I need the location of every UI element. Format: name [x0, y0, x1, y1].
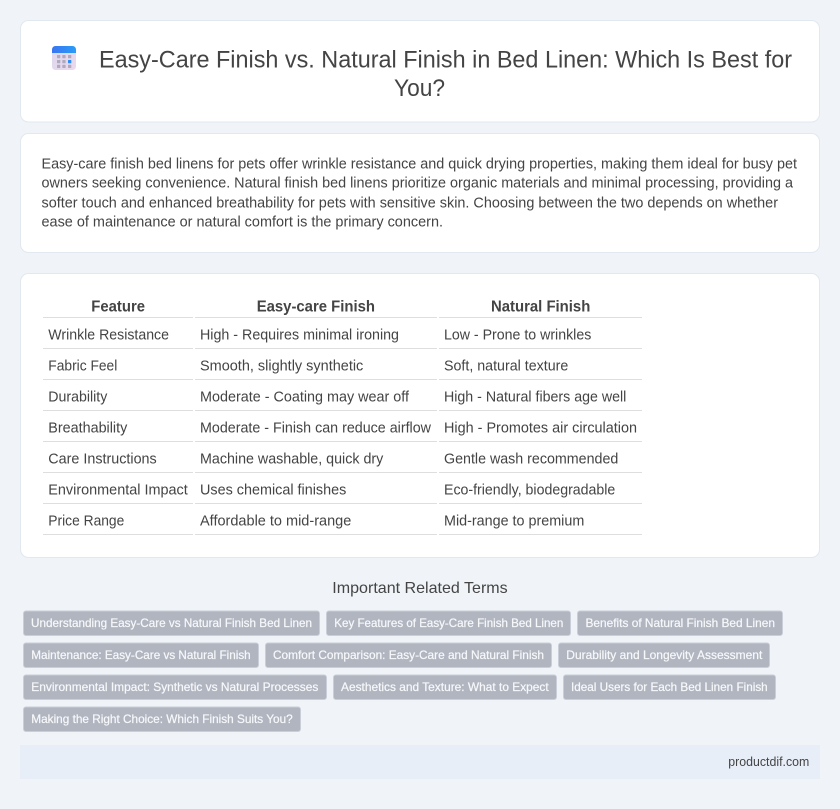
row: care instructions — [43, 451, 642, 473]
panel: comparison table — [20, 274, 820, 558]
tag: Key Features of Easy-Care Finish Bed Linen — [334, 616, 563, 630]
row: price range: Mid-range to premium — [444, 513, 584, 529]
tag: Ideal Users for Each Bed Linen Finish — [571, 680, 768, 694]
tag: Understanding Easy-Care vs Natural Finish Bed Linen — [31, 616, 312, 630]
tag — [326, 611, 570, 636]
row: durability: Moderate - Coating may wear off — [200, 389, 410, 405]
title — [99, 46, 792, 102]
tag: Comfort Comparison: Easy-Care and Natural Finish — [273, 648, 544, 662]
tag — [24, 707, 300, 732]
title: Easy-Care Finish vs. Natural Finish in Bed Linen: Which Is Best for — [99, 46, 792, 74]
tag: Aesthetics and Texture: What to Expect — [341, 680, 549, 694]
tag — [24, 675, 326, 700]
text block: introduction — [42, 156, 797, 230]
text block: introduction: Easy-care finish bed linens for pets offer wrinkle resistance and quick drying properties, making them ideal for busy pet — [42, 156, 797, 172]
row: wrinkle resistance — [43, 327, 642, 349]
row: environmental impact: Eco-friendly, biodegradable — [444, 482, 615, 498]
row: breathability: High - Promotes air circulation — [444, 420, 637, 436]
footer bar — [20, 745, 820, 779]
tag — [564, 675, 776, 700]
row: environmental impact — [43, 482, 642, 504]
tag — [578, 611, 782, 636]
table header row: Natural Finish — [491, 298, 590, 316]
tag: Environmental Impact: Synthetic vs Natural Processes — [31, 680, 318, 694]
tag — [334, 675, 556, 700]
row: fabric feel: Smooth, slightly synthetic — [200, 358, 363, 374]
row: wrinkle resistance: Wrinkle Resistance — [48, 327, 169, 343]
row: fabric feel — [43, 358, 642, 380]
title: You? — [394, 75, 445, 102]
tag: Making the Right Choice: Which Finish Suits You? — [31, 712, 293, 726]
text block: introduction: ease of maintenance or natural comfort is the primary concern. — [42, 214, 443, 230]
panel: related term tags — [24, 611, 782, 732]
row: durability: Durability — [48, 389, 108, 405]
row: price range: Price Range — [48, 513, 124, 529]
row: durability: High - Natural fibers age well — [444, 389, 626, 405]
tag: Benefits of Natural Finish Bed Linen — [586, 616, 775, 630]
heading: important related terms: Important Related Terms — [332, 580, 508, 597]
row: environmental impact: Uses chemical finishes — [200, 482, 346, 498]
panel: introduction text — [20, 134, 820, 252]
text block: introduction: owners seeking convenience. Natural finish bed linens prioritize organic materials and minimal processing, providing a — [42, 176, 793, 192]
row: price range: Affordable to mid-range — [200, 513, 351, 529]
row: price range — [43, 513, 642, 535]
text block: introduction: softer touch and enhanced breathability for pets with sensitive skin. Choosing between the two depends on whether — [42, 195, 778, 211]
table header row: Feature — [91, 298, 145, 316]
row: care instructions: Care Instructions — [48, 451, 157, 467]
tag — [558, 643, 770, 668]
row: care instructions: Gentle wash recommended — [444, 451, 618, 467]
footer source text: productdif.com — [728, 754, 809, 769]
row: breathability — [43, 420, 642, 442]
tag: Maintenance: Easy-Care vs Natural Finish — [31, 648, 251, 662]
tag — [24, 643, 258, 668]
panel: title header — [20, 20, 820, 122]
table header row: Easy-care Finish — [257, 298, 375, 316]
row: durability — [43, 389, 642, 411]
tag — [24, 611, 320, 636]
row: care instructions: Machine washable, quick dry — [200, 451, 384, 467]
tag: Durability and Longevity Assessment — [566, 648, 763, 662]
row: wrinkle resistance: Low - Prone to wrinkles — [444, 327, 591, 343]
icon: calendar — [52, 46, 76, 70]
row: fabric feel: Fabric Feel — [48, 358, 117, 374]
row: wrinkle resistance: High - Requires minimal ironing — [200, 327, 399, 343]
row: environmental impact: Environmental Impact — [48, 482, 188, 498]
row: breathability: Moderate - Finish can reduce airflow — [200, 420, 432, 436]
row: fabric feel: Soft, natural texture — [444, 358, 568, 374]
tag — [266, 643, 552, 668]
row: breathability: Breathability — [48, 420, 128, 436]
table header row — [43, 298, 642, 318]
